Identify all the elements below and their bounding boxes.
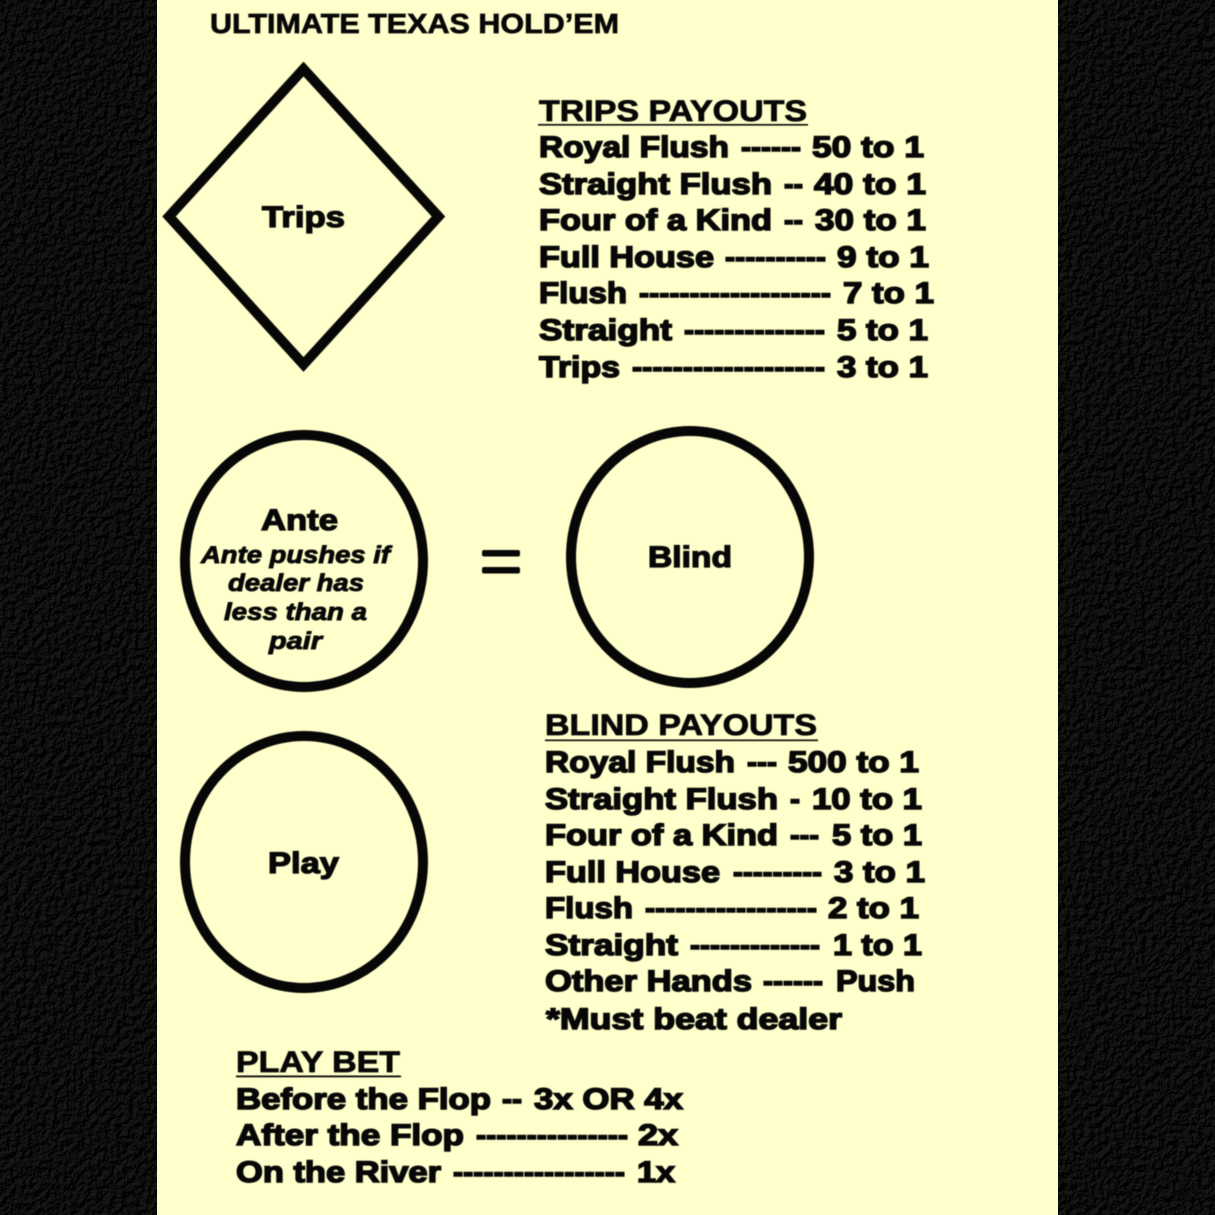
play bet rows: --------------- — [476, 1119, 628, 1152]
trips payout rows: 9 to 1 — [837, 241, 929, 274]
blind payout rows: Four of a Kind — [545, 819, 778, 852]
trips payouts table — [538, 95, 934, 384]
trips payout rows: 5 to 1 — [837, 314, 928, 347]
trips payout rows: 3 to 1 — [837, 351, 928, 384]
play bet heading: PLAY BET — [236, 1046, 400, 1079]
blind payout rows: - — [790, 783, 800, 816]
blind payout rows: Other Hands — [545, 965, 752, 998]
blind payout rows: 5 to 1 — [832, 819, 922, 852]
trips payout rows: Straight — [539, 314, 672, 347]
blind payout rows: Straight — [545, 929, 678, 962]
equals sign — [482, 550, 520, 574]
trips payout rows: ---------- — [725, 241, 826, 274]
trips payout rows: -- — [784, 204, 803, 237]
trips payouts heading: TRIPS PAYOUTS — [539, 95, 807, 128]
blind payouts table — [545, 709, 925, 1036]
trips payout rows: -------------- — [684, 314, 825, 347]
play bet rows: On the River — [236, 1156, 442, 1189]
blind payout rows: Flush — [545, 892, 633, 925]
blind payout rows: *Must beat dealer — [546, 1003, 843, 1036]
ante betting spot: circle with note: Ante — [261, 504, 338, 537]
play bet rows — [236, 1083, 684, 1189]
blind payout rows: ------ — [763, 965, 823, 998]
ante betting spot: circle with note — [185, 435, 423, 687]
blind payout rows: Royal Flush — [545, 746, 735, 779]
blind payout rows: --------- — [733, 856, 822, 889]
cream panel — [157, 0, 1058, 1215]
ante betting spot: circle with note: dealer has — [228, 570, 364, 597]
trips betting spot: diamond: Trips — [262, 201, 345, 234]
trips payout rows: 30 to 1 — [815, 204, 926, 237]
trips payout rows: Trips — [539, 351, 620, 384]
blind payout rows: Straight Flush — [545, 783, 778, 816]
play bet rows: 3x OR 4x — [534, 1083, 684, 1116]
trips payout rows: Flush — [539, 277, 627, 310]
blind payout rows: Full House — [545, 856, 720, 889]
trips payout rows: Full House — [539, 241, 714, 274]
trips payout rows: ------------------- — [639, 277, 831, 310]
play bet rows: ----------------- — [453, 1156, 625, 1189]
play bet table — [236, 1046, 684, 1189]
trips payout rows: 40 to 1 — [814, 168, 926, 201]
trips payout rows: 50 to 1 — [812, 131, 924, 164]
title: ULTIMATE TEXAS HOLD’EM — [210, 8, 619, 39]
blind payout rows: ----------------- — [645, 892, 817, 925]
play bet rows: 2x — [638, 1119, 679, 1152]
blind payout rows — [545, 746, 925, 1036]
blind payout rows: 3 to 1 — [834, 856, 925, 889]
blind payout rows: Push — [836, 965, 915, 998]
ante betting spot: circle with note: Ante pushes if — [200, 542, 392, 569]
ante betting spot: circle with note: pair — [268, 628, 324, 655]
trips payout rows: ------ — [741, 131, 801, 164]
trips payout rows: 7 to 1 — [843, 277, 934, 310]
play betting spot: circle — [185, 736, 423, 988]
trips payout rows: -- — [784, 168, 803, 201]
trips payout rows: Four of a Kind — [539, 204, 772, 237]
blind payout rows: 10 to 1 — [812, 783, 922, 816]
ante betting spot: circle with note: less than a — [224, 599, 367, 626]
blind payout rows: 1 to 1 — [833, 929, 922, 962]
trips payout rows: ------------------- — [632, 351, 825, 384]
play bet rows: 1x — [637, 1156, 676, 1189]
page content — [169, 8, 934, 1189]
trips payout rows: Royal Flush — [539, 131, 729, 164]
blind payout rows: 500 to 1 — [788, 746, 919, 779]
trips payout rows — [539, 131, 934, 384]
play bet rows: Before the Flop — [236, 1083, 491, 1116]
blind payout rows: ------------- — [690, 929, 820, 962]
play bet rows: After the Flop — [236, 1119, 464, 1152]
play betting spot: circle: Play — [268, 847, 340, 880]
blind betting spot: circle — [571, 431, 809, 683]
blind betting spot: circle: Blind — [648, 541, 732, 574]
play bet rows: -- — [502, 1083, 522, 1116]
blind payout rows: --- — [790, 819, 819, 852]
blind payouts heading: BLIND PAYOUTS — [545, 709, 817, 742]
blind payout rows: --- — [747, 746, 777, 779]
blind payout rows: 2 to 1 — [828, 892, 919, 925]
trips payout rows: Straight Flush — [539, 168, 772, 201]
trips betting spot: diamond — [169, 69, 438, 364]
